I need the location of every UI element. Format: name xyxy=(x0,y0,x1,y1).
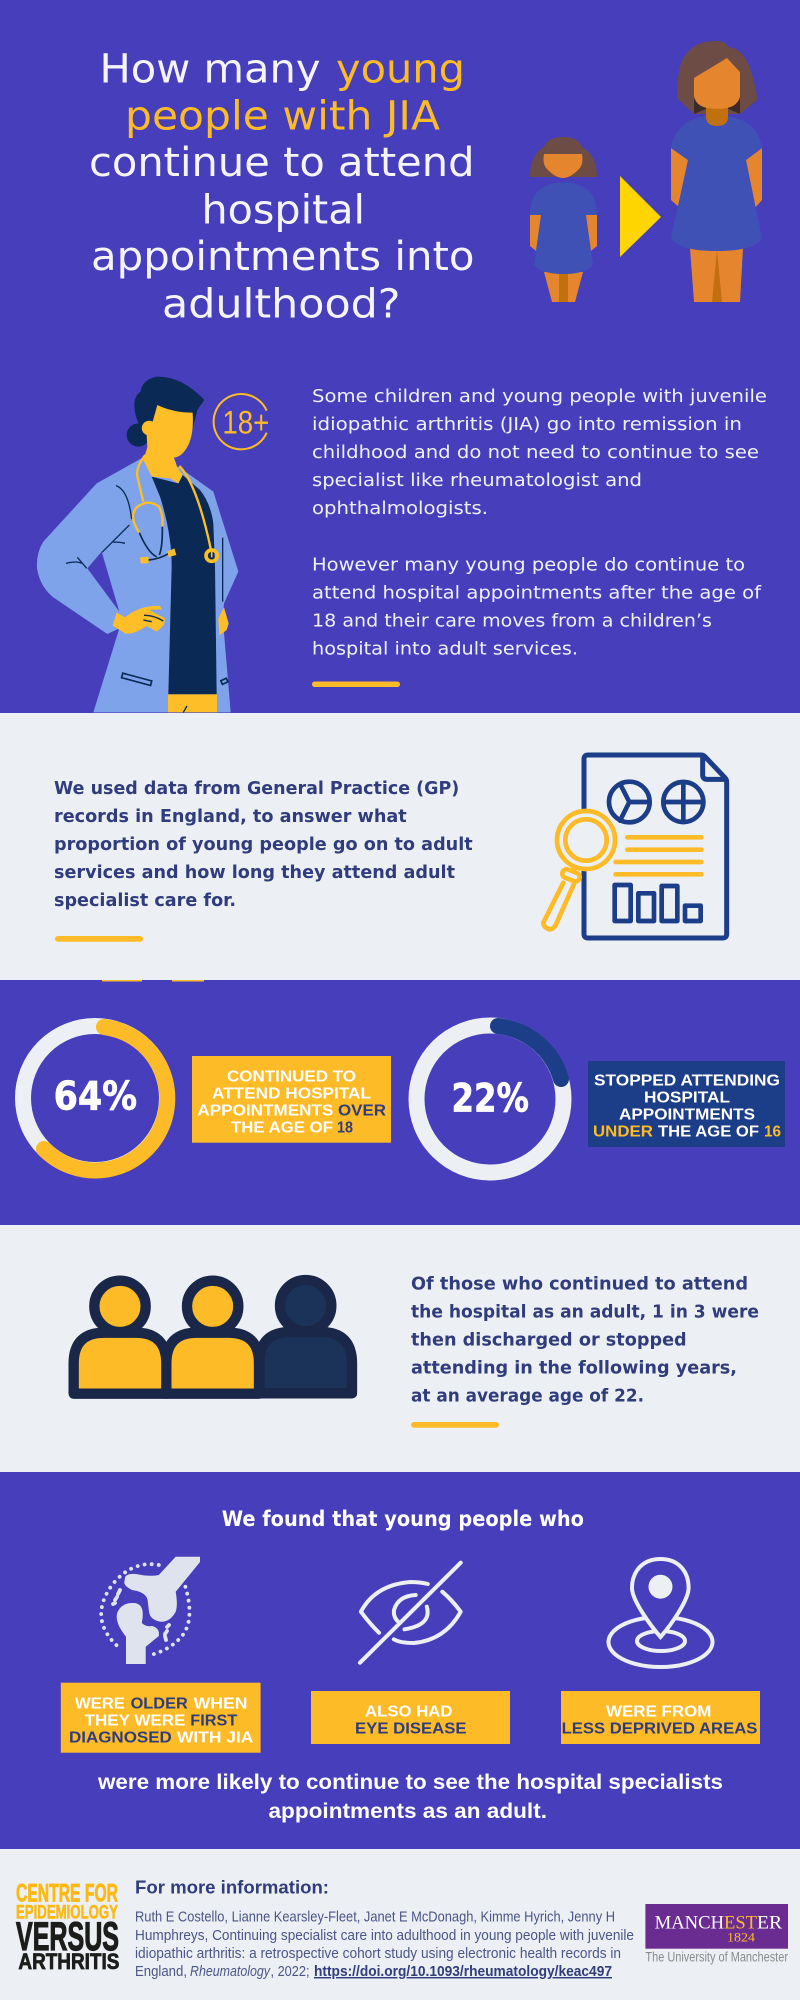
label: older at diagnosis: OLDER xyxy=(131,1695,188,1712)
text block: data used: records in England, to answer what xyxy=(54,806,407,827)
callout: continued attending: THE AGE OF xyxy=(231,1120,333,1137)
logo: University of Manchester: EST xyxy=(724,1912,757,1933)
callout: continued attending: CONTINUED TO xyxy=(227,1069,356,1086)
panel: footer xyxy=(0,1849,800,2000)
text block: citation: Humphreys, Continuing specialist care into adulthood in young people with juvenile xyxy=(135,1928,634,1944)
icon: 18 plus badge: 18+ xyxy=(222,404,269,440)
panel: header and intro xyxy=(0,0,800,713)
doctor face and neck xyxy=(142,405,193,483)
coat creases and pockets xyxy=(66,486,228,685)
text block: citation: Rheumatology xyxy=(190,1964,271,1980)
callout: stopped attending: STOPPED ATTENDING xyxy=(594,1073,780,1090)
text block: intro: 18 and their care moves from a children’s xyxy=(312,611,712,632)
text block: citation: England, xyxy=(135,1964,187,1980)
text block: citation: https://doi.org/10.1093/rheumatology/keac497 xyxy=(314,1964,612,1980)
text block: data used xyxy=(54,778,473,911)
callout: stopped attending: UNDER xyxy=(593,1123,653,1140)
callout: continued attending: OVER xyxy=(338,1103,386,1120)
text block: data used: We used data from General Practice (GP) xyxy=(54,778,459,799)
title: adulthood? xyxy=(162,281,400,327)
text block: data used: services and how long they attend adult xyxy=(54,862,455,883)
logo: University of Manchester: 1824 xyxy=(727,1930,756,1945)
text block: discharge finding: Of those who continued to attend xyxy=(411,1273,748,1294)
stethoscope xyxy=(133,455,217,564)
label: less deprived areas: WERE FROM xyxy=(606,1704,711,1721)
logo: Centre for Epidemiology Versus Arthritis: EPIDEMIOLOGY xyxy=(16,1901,118,1923)
illustration: doctor xyxy=(37,377,269,712)
title: appointments into xyxy=(91,234,474,280)
text block: citation: Ruth E Costello, Lianne Kearsley-Fleet, Janet E McDonagh, Kimme Hyrich, Jenny H xyxy=(135,1910,615,1926)
callout: stopped attending: THE AGE OF xyxy=(658,1123,759,1140)
doctor hair xyxy=(127,377,204,447)
arrow: growing up xyxy=(620,176,661,257)
heading: for more information: For more information: xyxy=(135,1876,329,1897)
text block: conclusion: were more likely to continue to see the hospital specialists xyxy=(97,1770,723,1794)
label: older at diagnosis: WERE xyxy=(75,1695,125,1712)
text block: intro xyxy=(312,386,767,660)
callout: stopped attending xyxy=(588,1061,785,1147)
title: continue to attend xyxy=(89,140,474,186)
text block: citation: , 2022; xyxy=(270,1964,310,1980)
logo: Centre for Epidemiology Versus Arthritis: ARTHRITIS xyxy=(18,1949,119,1974)
logo: Centre for Epidemiology Versus Arthritis: CENTRE FOR xyxy=(16,1880,118,1908)
icon: adult figure xyxy=(671,41,762,302)
chart: 22 percent ring: 22% xyxy=(452,1077,529,1122)
text block: intro: childhood and do not need to continue to see xyxy=(312,442,759,463)
text block: discharge finding: attending in the following years, xyxy=(411,1357,737,1378)
title: young xyxy=(336,47,465,93)
label: eye disease xyxy=(311,1691,510,1744)
panel: data source xyxy=(0,713,800,982)
callout: continued attending: 18 xyxy=(337,1120,353,1137)
text block: conclusion: appointments as an adult. xyxy=(268,1799,547,1823)
label: eye disease: EYE DISEASE xyxy=(355,1721,467,1738)
text block: citation: idiopathic arthritis: a retrospective cohort study using electronic health records in xyxy=(135,1946,621,1962)
callout: continued attending xyxy=(192,1056,391,1143)
text block: discharge finding: then discharged or stopped xyxy=(411,1329,687,1350)
panel: predictors xyxy=(0,1472,800,1849)
text block: citation xyxy=(135,1910,634,1980)
logo: Centre for Epidemiology Versus Arthritis xyxy=(16,1880,119,1974)
logo: University of Manchester: MANCH xyxy=(655,1912,724,1933)
label: older at diagnosis: FIRST xyxy=(190,1712,238,1729)
doctor trousers xyxy=(168,694,217,712)
text block: discharge finding: the hospital as an adult, 1 in 3 were xyxy=(411,1301,759,1322)
text block: intro: ophthalmologists. xyxy=(312,498,488,519)
panel: key statistics xyxy=(0,982,800,1225)
callout: continued attending: APPOINTMENTS xyxy=(197,1103,333,1120)
icon: report with magnifying glass xyxy=(543,755,727,938)
label: eye disease: ALSO HAD xyxy=(365,1704,452,1721)
callout: continued attending: ATTEND HOSPITAL xyxy=(212,1086,371,1103)
text block: discharge finding xyxy=(411,1273,759,1406)
label: older at diagnosis: THEY WERE xyxy=(85,1712,185,1729)
title: How many xyxy=(100,47,320,93)
logo: Centre for Epidemiology Versus Arthritis: VERSUS xyxy=(16,1915,119,1959)
label: less deprived areas xyxy=(561,1691,760,1744)
title: people with JIA xyxy=(125,93,441,139)
icon: three people xyxy=(74,1280,352,1394)
icon: child figure xyxy=(530,137,597,302)
icon: eye disease xyxy=(360,1563,461,1663)
panel: one in three xyxy=(0,1225,800,1472)
doctor hands xyxy=(113,606,229,635)
title: hospital xyxy=(202,187,365,233)
callout: stopped attending: APPOINTMENTS xyxy=(619,1107,755,1124)
title xyxy=(89,47,474,327)
icon: joint xyxy=(101,1557,200,1664)
label: older at diagnosis: DIAGNOSED xyxy=(69,1729,172,1746)
text block: intro: hospital into adult services. xyxy=(312,639,578,660)
text block: intro: specialist like rheumatologist and xyxy=(312,470,642,491)
icon: 18 plus badge xyxy=(214,394,269,449)
doctor shirt xyxy=(152,475,217,694)
callout: stopped attending: HOSPITAL xyxy=(644,1090,730,1107)
logo: University of Manchester: ER xyxy=(757,1912,782,1933)
label: less deprived areas: LESS DEPRIVED AREAS xyxy=(562,1721,757,1738)
text block: discharge finding: at an average age of 22. xyxy=(411,1385,644,1406)
logo: University of Manchester xyxy=(645,1904,788,1965)
chart: 64 percent ring xyxy=(23,1026,167,1170)
label: older at diagnosis: WITH JIA xyxy=(177,1729,253,1746)
text block: intro: Some children and young people with juvenile xyxy=(312,386,767,407)
text block: intro: idiopathic arthritis (JIA) go into remission in xyxy=(312,414,742,435)
text block: data used: specialist care for. xyxy=(54,890,236,911)
heading: we found: We found that young people who xyxy=(222,1507,584,1531)
text block: intro: However many young people do continue to xyxy=(312,555,745,576)
text block: intro: attend hospital appointments after the age of xyxy=(312,583,762,604)
text block: conclusion xyxy=(97,1770,723,1823)
callout: stopped attending: 16 xyxy=(764,1123,781,1140)
icon: location pin xyxy=(608,1559,712,1667)
chart: 64 percent ring: 64% xyxy=(54,1074,137,1119)
label: older at diagnosis xyxy=(61,1683,261,1753)
chart: 22 percent ring xyxy=(416,1026,564,1172)
text block: data used: proportion of young people go on to adult xyxy=(54,834,473,855)
doctor coat xyxy=(37,457,238,712)
label: older at diagnosis: WHEN xyxy=(194,1695,248,1712)
